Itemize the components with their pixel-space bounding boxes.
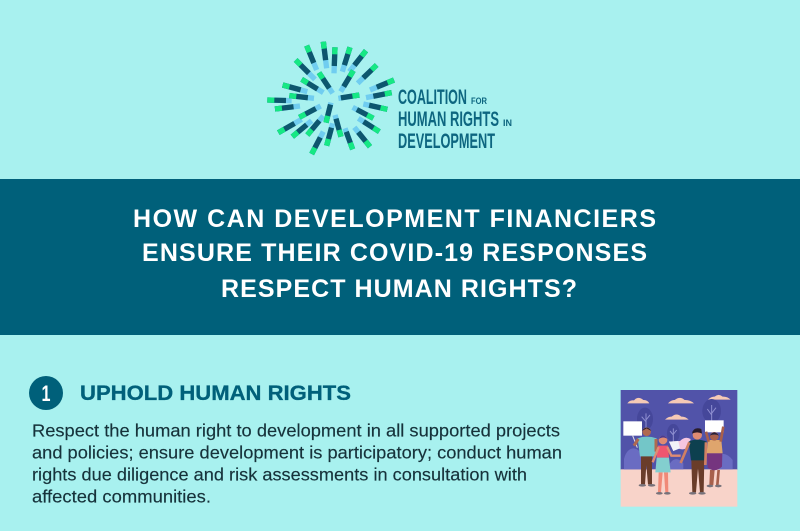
- body text: and policies; ensure development is participatory; conduct human: [32, 442, 562, 462]
- title: RESPECT HUMAN RIGHTS?: [221, 275, 577, 303]
- ground: [621, 469, 737, 507]
- logo: Coalition for Human Rights in Development: [267, 42, 512, 154]
- icon: starburst logo mark: [267, 42, 394, 154]
- trees and bushes: [624, 448, 733, 469]
- illustration: people holding protest signs: [621, 390, 737, 507]
- title: HOW CAN DEVELOPMENT FINANCIERS: [133, 205, 656, 233]
- logo wordmark: [398, 85, 512, 153]
- person 4 with raised sign: [705, 420, 724, 487]
- person 3 dark shirt: [681, 428, 707, 495]
- title: ENSURE THEIR COVID-19 RESPONSES: [142, 239, 647, 267]
- sky: [621, 390, 737, 470]
- number badge 1: 1: [42, 381, 50, 406]
- person 2 in skirt: [653, 435, 681, 495]
- title: [133, 205, 656, 303]
- logo wordmark: COALITION: [398, 85, 467, 109]
- clouds: [627, 395, 731, 420]
- speech bubble: [669, 438, 691, 451]
- logo wordmark: FOR: [471, 96, 487, 107]
- section heading: UPHOLD HUMAN RIGHTS: [80, 381, 351, 405]
- body text: [32, 420, 562, 506]
- title banner: [0, 179, 800, 335]
- logo wordmark: HUMAN RIGHTS: [398, 107, 499, 131]
- body text: affected communities.: [32, 486, 211, 506]
- number badge 1: [29, 376, 63, 410]
- logo wordmark: DEVELOPMENT: [398, 129, 495, 153]
- body text: rights due diligence and risk assessments in consultation with: [32, 464, 527, 484]
- logo wordmark: IN: [503, 118, 512, 129]
- person 1 with sign: [623, 421, 657, 487]
- body text: Respect the human right to development in all supported projects: [32, 420, 560, 440]
